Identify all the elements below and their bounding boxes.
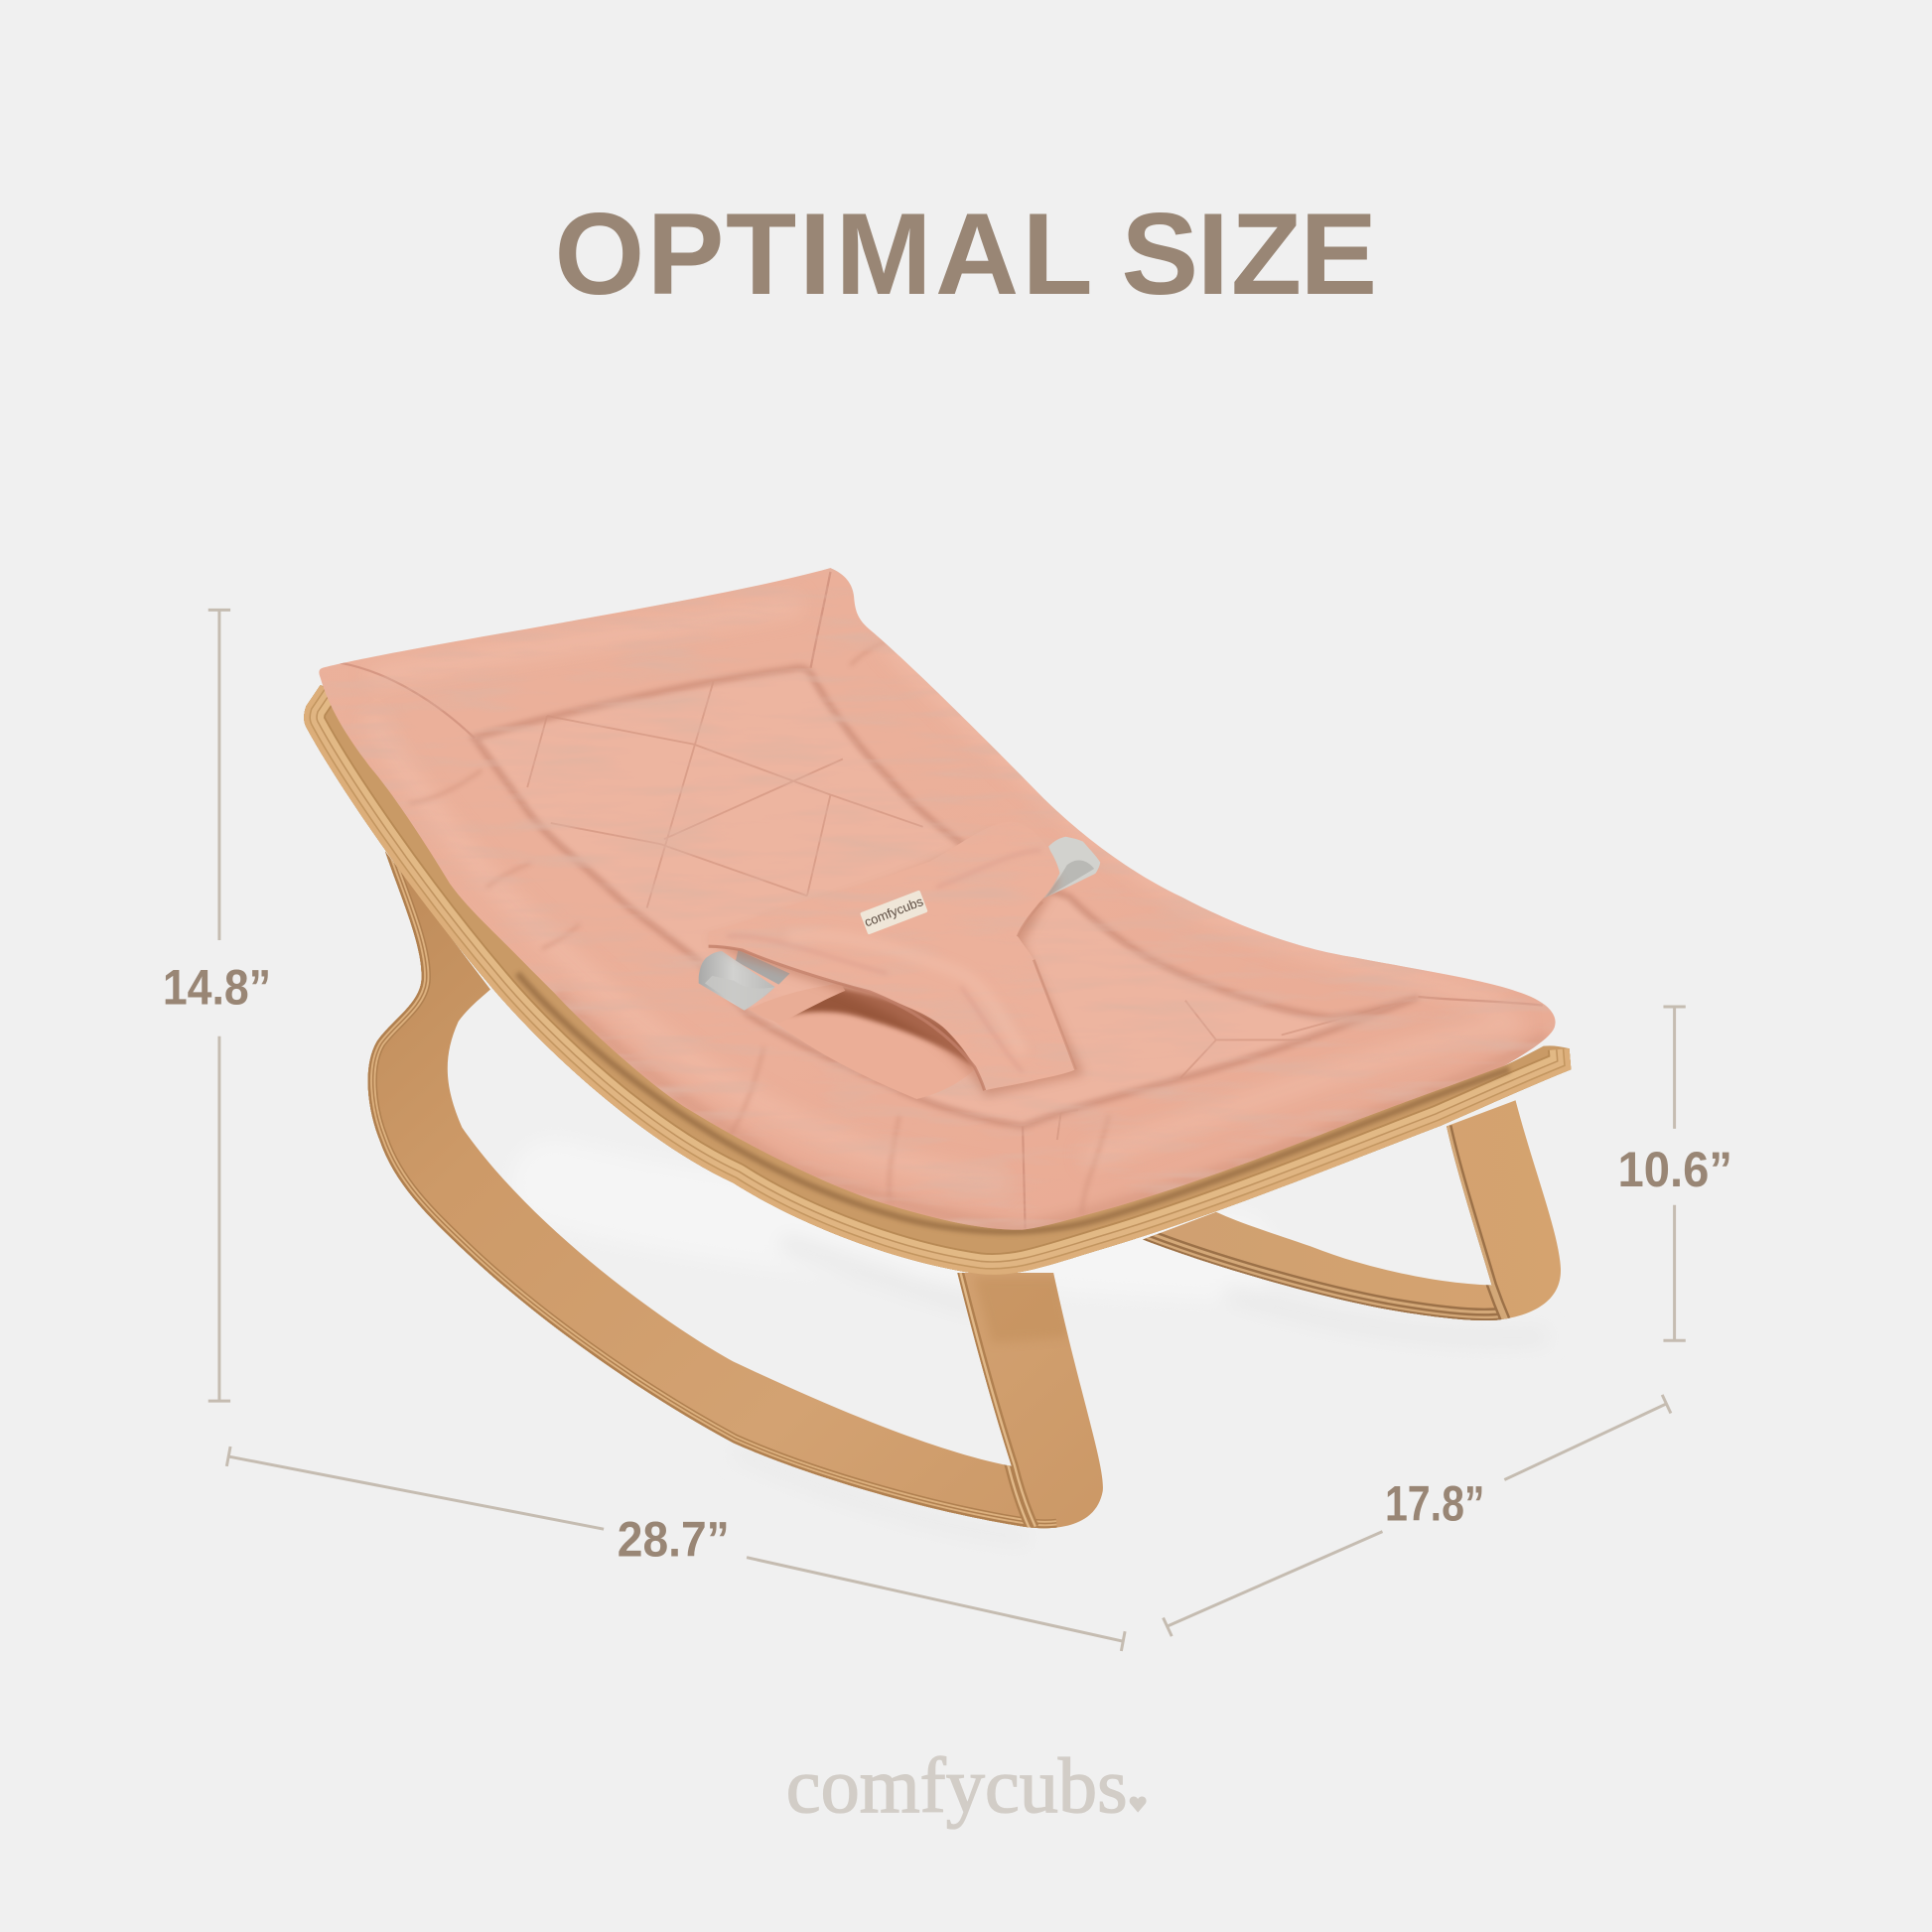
front rocker xyxy=(368,852,1103,1529)
cushion shadow on board xyxy=(517,973,1509,1232)
seat pocket under harness xyxy=(770,991,975,1099)
rear rocker xyxy=(1143,1100,1561,1320)
corner seams xyxy=(341,572,1543,1228)
recess seam shadow xyxy=(475,668,1418,1126)
icon: right grey strap xyxy=(1041,837,1100,899)
soft floor shadows xyxy=(554,1182,1540,1538)
harness fold shading xyxy=(709,946,985,1090)
icon: left grey strap xyxy=(699,950,790,1011)
dimension: width 17.8 xyxy=(1164,1395,1671,1636)
harness crotch fold xyxy=(750,983,845,1023)
logo: comfycubs: comfycubs xyxy=(786,1742,1128,1830)
roll creases xyxy=(409,638,1109,1213)
leg shadow under board xyxy=(977,1278,1067,1340)
dimension: seat height 10.6 xyxy=(1618,1007,1732,1340)
harness shadow opening xyxy=(788,988,973,1067)
front edge shade xyxy=(554,993,1547,1230)
cushion shading xyxy=(341,572,1547,1230)
infographic canvas xyxy=(165,212,1729,1830)
title: OPTIMAL SIZE xyxy=(554,189,1377,319)
dimension: length 28.7 xyxy=(226,1447,1125,1651)
border ridge highlights xyxy=(753,718,1511,1164)
quilting stitches xyxy=(527,681,1380,1140)
plywood edge stripes xyxy=(304,685,1571,1275)
cushion xyxy=(319,568,1556,1230)
harness label: comfycubs xyxy=(862,894,925,929)
harness xyxy=(709,822,1075,1090)
dimension: width 17.8: 17.8” xyxy=(1385,1475,1484,1531)
dimension: height 14.8: 14.8” xyxy=(163,959,271,1015)
icon: logo heart xyxy=(1130,1796,1147,1813)
harness shadow xyxy=(709,833,1084,1097)
seat board xyxy=(304,685,1571,1275)
cushion base xyxy=(319,568,1556,1230)
dimension: height 14.8 xyxy=(163,610,271,1401)
dimension: length 28.7: 28.7” xyxy=(618,1511,730,1567)
inner recess xyxy=(933,971,1328,1120)
dimension: seat height 10.6: 10.6” xyxy=(1618,1142,1732,1197)
product illustration: wooden baby rocker with pink cushion xyxy=(304,568,1571,1538)
